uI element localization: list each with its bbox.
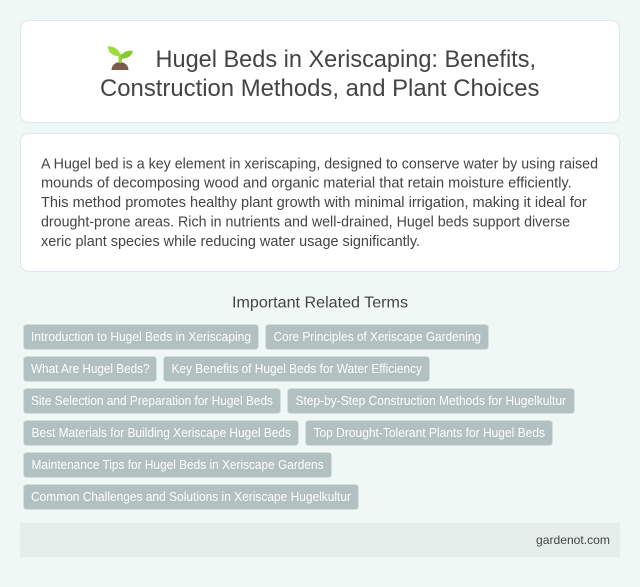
text block: description: This method promotes healthy plant growth with minimal irrigation, making it ideal for bbox=[41, 195, 587, 211]
tag bbox=[288, 388, 574, 414]
heading: related terms: Important Related Terms bbox=[232, 294, 408, 311]
panel: title card bbox=[20, 20, 620, 122]
panel: description card bbox=[20, 134, 620, 272]
text block: description: drought-prone areas. Rich in nutrients and well-drained, Hugel beds support diverse bbox=[41, 214, 570, 230]
text block: description bbox=[41, 156, 598, 250]
icon: seedling bbox=[108, 46, 133, 70]
tag list: related terms bbox=[24, 324, 574, 510]
tag: Maintenance Tips for Hugel Beds in Xeriscape Gardens bbox=[32, 458, 324, 472]
tag bbox=[306, 420, 552, 446]
tag: Common Challenges and Solutions in Xeriscape Hugelkultur bbox=[31, 490, 351, 504]
footer bbox=[20, 523, 620, 557]
text block: description: A Hugel bed is a key element in xeriscaping, designed to conserve water by using raised bbox=[41, 156, 598, 172]
title bbox=[100, 46, 540, 102]
tag: What Are Hugel Beds? bbox=[31, 362, 150, 376]
text block: description: mounds of decomposing wood and organic material that retain moisture efficiently. bbox=[41, 176, 572, 192]
tag bbox=[24, 388, 280, 414]
tag bbox=[24, 324, 258, 350]
title: Hugel Beds in Xeriscaping: Benefits, bbox=[156, 46, 536, 73]
tag bbox=[266, 324, 488, 350]
text block: description: xeric plant species while reducing water usage significantly. bbox=[41, 234, 420, 250]
tag: Top Drought-Tolerant Plants for Hugel Beds bbox=[314, 426, 545, 440]
tag: Step-by-Step Construction Methods for Hugelkultur bbox=[296, 394, 566, 408]
tag bbox=[24, 356, 156, 382]
tag: Site Selection and Preparation for Hugel Beds bbox=[31, 394, 273, 408]
tag bbox=[24, 484, 358, 510]
title: Construction Methods, and Plant Choices bbox=[100, 75, 540, 102]
tag: Key Benefits of Hugel Beds for Water Efficiency bbox=[172, 362, 423, 376]
tag bbox=[24, 420, 298, 446]
tag bbox=[24, 452, 332, 478]
tag bbox=[164, 356, 430, 382]
tag: Core Principles of Xeriscape Gardening bbox=[274, 330, 481, 344]
tag: Introduction to Hugel Beds in Xeriscaping bbox=[31, 330, 251, 344]
footer credit: gardenot.com bbox=[536, 533, 610, 547]
tag: Best Materials for Building Xeriscape Hugel Beds bbox=[32, 426, 291, 440]
